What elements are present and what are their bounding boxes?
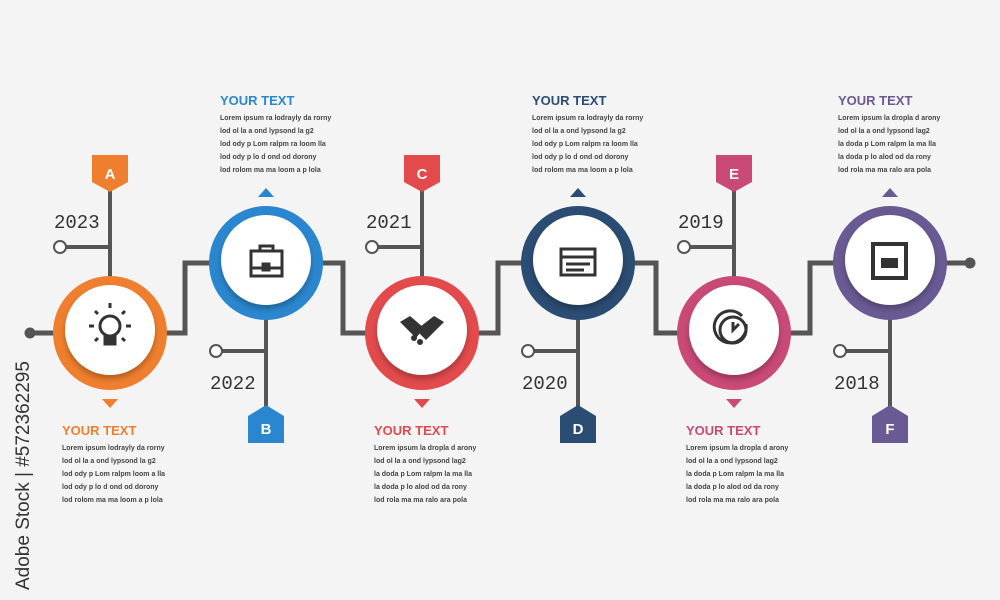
- circle 5 pink clock: [677, 276, 791, 390]
- text block top 1: lod rolom ma ma loom a p lola: [220, 167, 321, 174]
- text block top 2: lod rolom ma ma loom a p lola: [532, 167, 633, 174]
- stem lines: [62, 190, 890, 410]
- timeline connector: [27, 260, 973, 336]
- text block bottom 3: lod ol la a ond lypsond lag2: [686, 458, 778, 465]
- text block top 1: [220, 93, 331, 174]
- years: [54, 212, 880, 395]
- text block bottom 1: lod rolom ma ma loom a p lola: [62, 497, 163, 504]
- text block bottom 3: Lorem ipsum la dropla d arony: [686, 445, 788, 452]
- icon: bulb: [89, 303, 131, 344]
- text block bottom 2: la doda p Lom ralpm la ma lla: [374, 471, 472, 478]
- text block top 2: lod ody p lo d ond od dorony: [532, 154, 629, 161]
- text block top 2: [532, 93, 643, 174]
- tag B: [248, 405, 284, 443]
- text block bottom 2: [374, 423, 476, 504]
- text block top 3: lod rola ma ma ralo ara pola: [838, 167, 931, 174]
- circle 2 blue briefcase: [209, 206, 323, 320]
- text block top 1: YOUR TEXT: [220, 93, 294, 108]
- text block bottom 2: Lorem ipsum la dropla d arony: [374, 445, 476, 452]
- text block bottom 1: lod ol la a ond lypsond la g2: [62, 458, 156, 465]
- years: 2020: [522, 373, 568, 395]
- text block top 1: Lorem ipsum ra lodrayly da rorny: [220, 115, 331, 122]
- text block top 1: lod ody p Lom ralpm ra loom lla: [220, 141, 326, 148]
- icon: handshake: [400, 316, 444, 345]
- text block top 2: lod ol la a ond lypsond la g2: [532, 128, 626, 135]
- text block bottom 2: YOUR TEXT: [374, 423, 448, 438]
- years: 2019: [678, 212, 724, 234]
- text block bottom 2: lod ol la a ond lypsond lag2: [374, 458, 466, 465]
- icon: box: [873, 244, 906, 278]
- text block bottom 1: [62, 423, 165, 504]
- tag D: D: [573, 421, 584, 438]
- circle markers: [102, 188, 898, 408]
- icon: briefcase: [251, 246, 282, 276]
- tag D: [560, 405, 596, 443]
- text block top 3: Lorem ipsum la dropla d arony: [838, 115, 940, 122]
- text block top 2: Lorem ipsum ra lodrayly da rorny: [532, 115, 643, 122]
- tag A: [92, 155, 128, 192]
- text block top 3: YOUR TEXT: [838, 93, 912, 108]
- text block bottom 3: la doda p lo alod od da rony: [686, 484, 779, 491]
- text block bottom 1: lod ody p lo d ond od dorony: [62, 484, 159, 491]
- small node circles: [54, 241, 846, 357]
- text block top 3: la doda p Lom ralpm la ma lla: [838, 141, 936, 148]
- years: 2023: [54, 212, 100, 234]
- text block top 1: lod ody p lo d ond od dorony: [220, 154, 317, 161]
- text block bottom 1: YOUR TEXT: [62, 423, 136, 438]
- icon: clock: [714, 311, 746, 343]
- text block top 3: [838, 93, 940, 174]
- text block bottom 1: lod ody p Lom ralpm loom a lla: [62, 471, 165, 478]
- years: 2022: [210, 373, 256, 395]
- text block bottom 2: la doda p lo alod od da rony: [374, 484, 467, 491]
- circle 1 orange bulb: [53, 276, 167, 390]
- tag A: A: [105, 166, 116, 183]
- text block top 3: lod ol la a ond lypsond lag2: [838, 128, 930, 135]
- tag F: [872, 405, 908, 443]
- tag C: C: [417, 166, 428, 183]
- icon: document: [561, 249, 595, 275]
- text block bottom 2: lod rola ma ma ralo ara pola: [374, 497, 467, 504]
- text block bottom 3: lod rola ma ma ralo ara pola: [686, 497, 779, 504]
- watermark id: Adobe Stock | #572362295: [13, 361, 34, 590]
- text block top 2: lod ody p Lom ralpm ra loom lla: [532, 141, 638, 148]
- tag C: [404, 155, 440, 192]
- circle 4 navy document: [521, 206, 635, 320]
- text block top 1: lod ol la a ond lypsond la g2: [220, 128, 314, 135]
- tag F: F: [885, 421, 895, 438]
- text block bottom 3: [686, 423, 788, 504]
- tag B: B: [261, 421, 272, 438]
- text block bottom 3: YOUR TEXT: [686, 423, 760, 438]
- text block bottom 1: Lorem ipsum lodrayly da rorny: [62, 445, 165, 452]
- text block top 2: YOUR TEXT: [532, 93, 606, 108]
- years: 2021: [366, 212, 412, 234]
- text block top 3: la doda p lo alod od da rony: [838, 154, 931, 161]
- years: 2018: [834, 373, 880, 395]
- tag E: [716, 155, 752, 192]
- circle 3 red handshake: [365, 276, 479, 390]
- tag E: E: [729, 166, 739, 183]
- circle 6 purple box: [833, 206, 947, 320]
- text block bottom 3: la doda p Lom ralpm la ma lla: [686, 471, 784, 478]
